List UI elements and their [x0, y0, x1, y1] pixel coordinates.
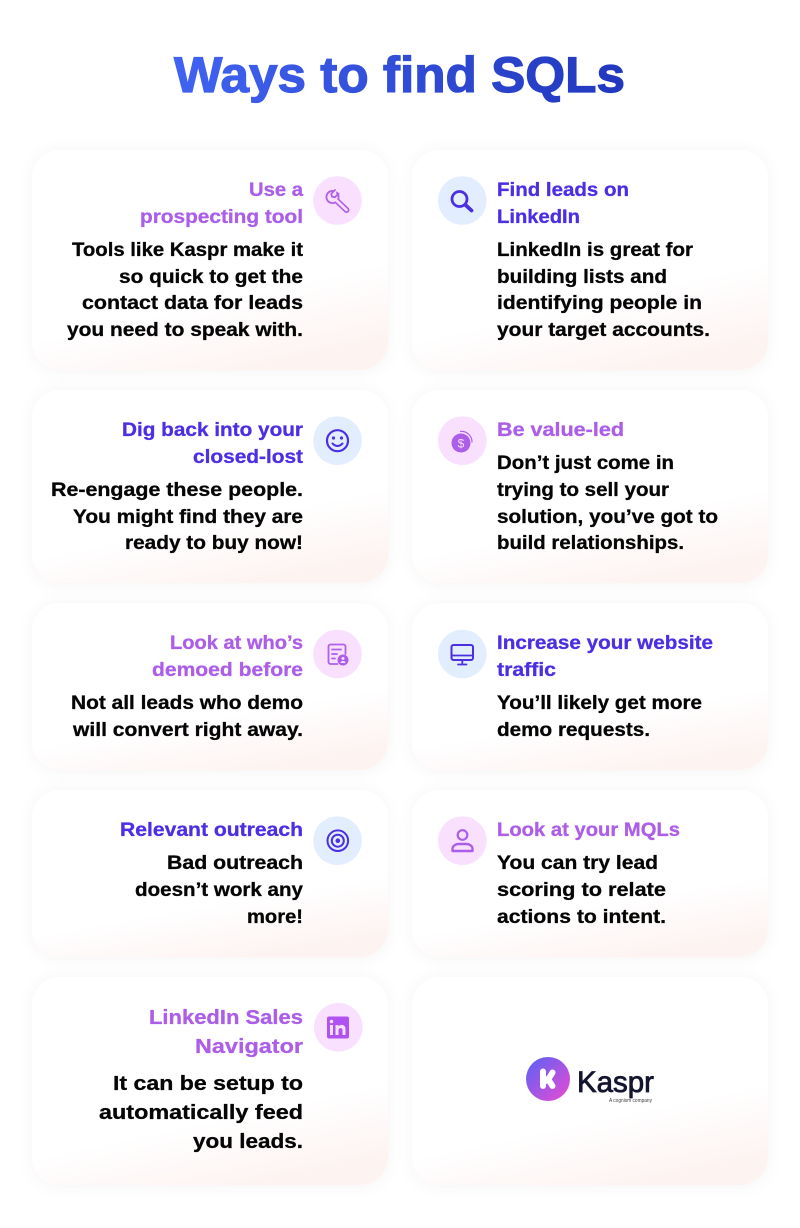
icon: smiley [313, 416, 362, 465]
text: traffic description: You’ll likely get more [497, 693, 702, 714]
panel: dig back into closed-lost [32, 390, 388, 583]
text: MQL description: You can try lead [497, 853, 658, 874]
text: prospecting tool description: so quick to get the [119, 267, 303, 288]
heading: be value-led: Be value-led [497, 420, 624, 441]
heading: increase your website traffic [497, 633, 713, 681]
text: prospecting tool description: contact data for leads [82, 293, 303, 314]
heading: look at your MQLs: Look at your MQLs [497, 820, 680, 841]
panel: increase website traffic [412, 603, 768, 770]
heading: find leads on LinkedIn: Find leads on [497, 180, 629, 201]
panel: find leads on LinkedIn [412, 150, 768, 370]
heading: look at who's demoed before [152, 633, 303, 681]
text: traffic description: demo requests. [497, 720, 650, 741]
icon: wrench [313, 176, 362, 225]
text: value-led description: Don’t just come in [497, 453, 674, 474]
text: Sales Navigator description [99, 1073, 303, 1153]
heading: relevant outreach: Relevant outreach [120, 820, 303, 841]
panel: be value-led [412, 390, 768, 583]
text: demo description: Not all leads who demo [71, 693, 303, 714]
panel: look at who's demoed before [32, 603, 388, 770]
heading: find leads on LinkedIn: LinkedIn [497, 207, 580, 228]
heading: increase your website traffic: Increase your website [497, 633, 713, 654]
text: traffic description [497, 693, 702, 741]
heading: use a prospecting tool [140, 180, 303, 228]
text: Sales Navigator description: automatically feed [99, 1102, 303, 1124]
logo: Kaspr: A cognism company [609, 1098, 652, 1104]
text: prospecting tool description [67, 240, 304, 341]
panel: relevant outreach [32, 790, 388, 957]
text: outreach description [135, 853, 303, 928]
heading: use a prospecting tool: Use a [249, 180, 303, 201]
text: LinkedIn description: building lists and [497, 267, 667, 288]
heading: dig back into your closed-lost: closed-lost [193, 447, 304, 468]
text: closed-lost description: Re-engage these people. [51, 480, 303, 501]
heading: LinkedIn Sales Navigator: LinkedIn Sales [149, 1007, 303, 1029]
text: MQL description: actions to intent. [497, 907, 666, 928]
text: value-led description: solution, you’ve got to [497, 507, 718, 528]
text: LinkedIn description [497, 240, 710, 341]
heading: LinkedIn Sales Navigator: Navigator [195, 1036, 303, 1058]
text: prospecting tool description: Tools like Kaspr make it [72, 240, 304, 261]
heading: find leads on LinkedIn [497, 180, 629, 228]
title: Ways to find SQLs [174, 47, 625, 103]
text: demo description: will convert right away. [72, 720, 303, 741]
text: MQL description: scoring to relate [497, 880, 666, 901]
text: prospecting tool description: you need to speak with. [67, 320, 303, 341]
heading: LinkedIn Sales Navigator [149, 1007, 303, 1058]
heading: dig back into your closed-lost [122, 420, 304, 468]
text: value-led description: trying to sell your [497, 480, 670, 501]
heading: use a prospecting tool: prospecting tool [140, 207, 303, 228]
text: value-led description [497, 453, 718, 554]
text: LinkedIn description: LinkedIn is great for [497, 240, 694, 261]
panel: LinkedIn Sales Navigator [32, 977, 388, 1185]
text: MQL description [497, 853, 666, 928]
text: outreach description: doesn’t work any [135, 880, 303, 901]
heading: look at who's demoed before: demoed before [152, 660, 303, 681]
text: LinkedIn description: identifying people in [497, 293, 702, 314]
icon: target [313, 816, 362, 865]
text: outreach description: Bad outreach [167, 853, 303, 874]
icon: coin: $ [458, 436, 465, 450]
panel: use a prospecting tool [32, 150, 388, 370]
icon: monitor [438, 630, 487, 678]
icon: LinkedIn [314, 1003, 363, 1052]
logo: Kaspr [526, 1057, 654, 1104]
text: value-led description: build relationships. [497, 533, 684, 554]
heading: look at who's demoed before: Look at who’s [170, 633, 303, 654]
text: LinkedIn description: your target accounts. [497, 320, 710, 341]
text: closed-lost description: You might find they are [73, 507, 303, 528]
panel: look at your MQLs [412, 790, 768, 957]
panel: Kaspr logo [412, 977, 768, 1185]
text: closed-lost description: ready to buy now! [125, 533, 303, 554]
heading: increase your website traffic: traffic [497, 660, 556, 681]
icon: magnifier [438, 176, 487, 225]
text: outreach description: more! [247, 907, 303, 928]
text: demo description [71, 693, 303, 741]
text: Sales Navigator description: you leads. [193, 1131, 303, 1153]
text: Sales Navigator description: It can be setup to [113, 1073, 303, 1095]
icon: contact document [313, 630, 362, 678]
logo: Kaspr: Kaspr [577, 1066, 654, 1099]
text: closed-lost description [51, 480, 303, 554]
heading: dig back into your closed-lost: Dig back into your [122, 420, 304, 441]
icon: person [438, 816, 487, 865]
icon: coin [438, 416, 487, 465]
